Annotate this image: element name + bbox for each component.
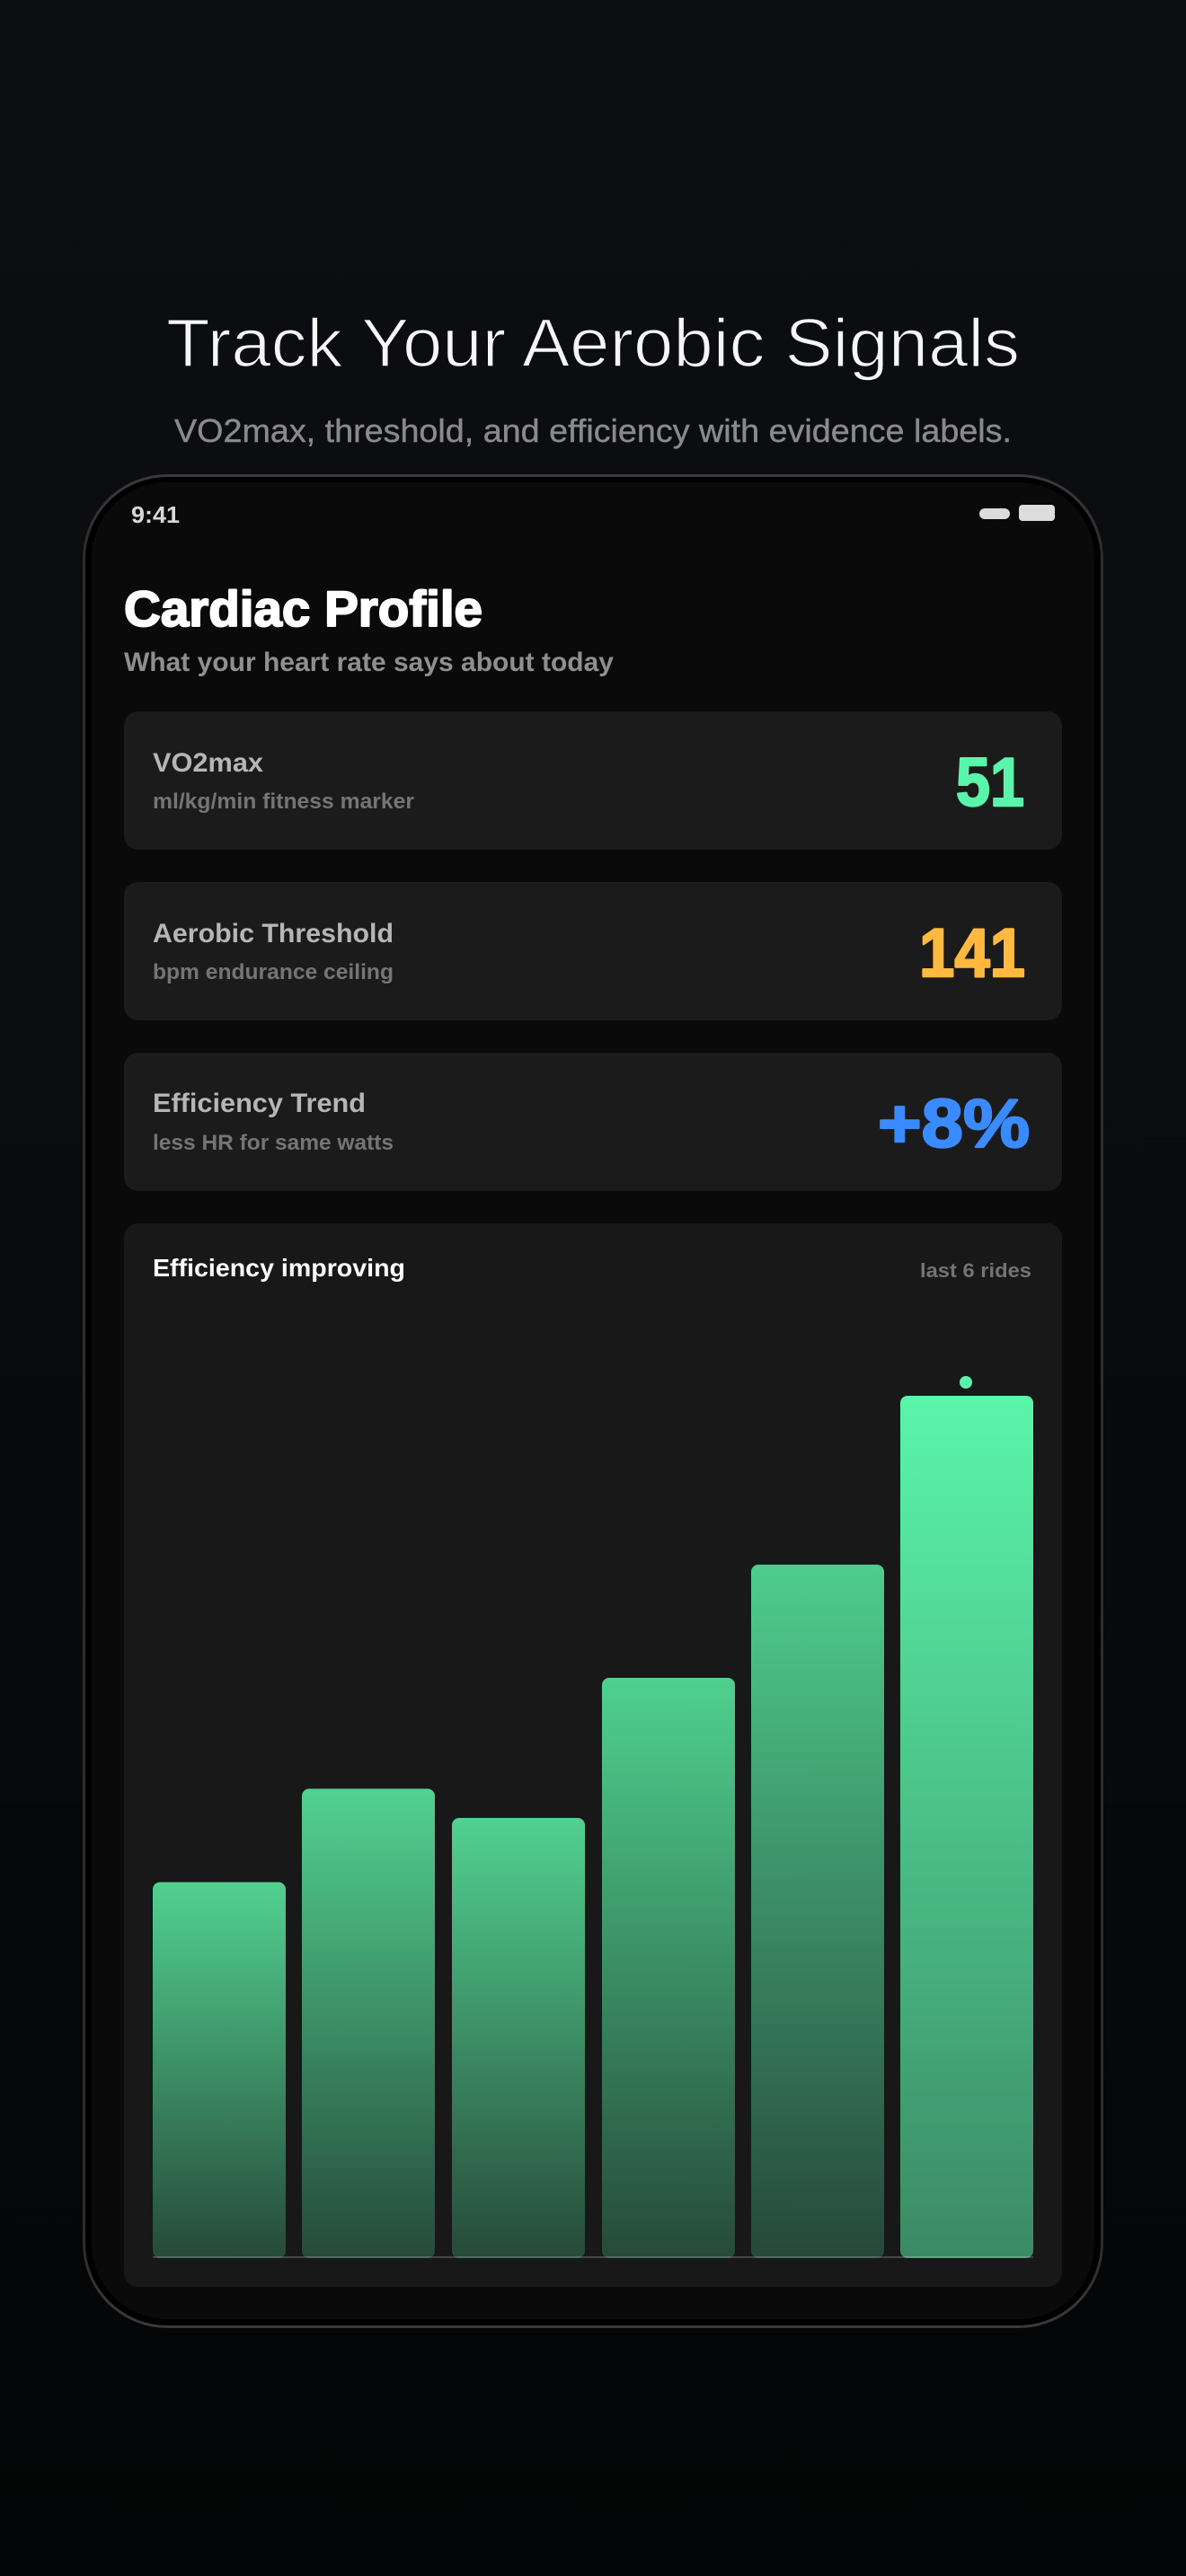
phone frame xyxy=(84,476,1102,2326)
panel: VO2max xyxy=(124,711,1062,850)
value: 51 xyxy=(956,745,1024,821)
subtitle: VO2max, threshold, and efficiency with evidence labels. xyxy=(174,412,1012,449)
bar 4 xyxy=(602,1678,735,2258)
bar 2 xyxy=(302,1789,435,2258)
label: Aerobic Threshold xyxy=(153,919,394,948)
title: Track Your Aerobic Signals xyxy=(166,305,1020,382)
panel: efficiency chart xyxy=(124,1223,1062,2287)
label: Efficiency Trend xyxy=(153,1089,366,1118)
screen heading: Cardiac Profile xyxy=(124,580,482,637)
marker dot xyxy=(960,1376,972,1389)
value: +8% xyxy=(878,1086,1030,1162)
bar 1 xyxy=(153,1883,286,2258)
bar chart xyxy=(153,1376,1033,2258)
description: bpm endurance ceiling xyxy=(153,960,394,984)
bar 3 xyxy=(452,1818,585,2258)
description: less HR for same watts xyxy=(153,1131,394,1155)
chart range label: last 6 rides xyxy=(920,1259,1031,1282)
bar 6 xyxy=(900,1396,1033,2258)
status bar xyxy=(131,501,1055,528)
battery icon xyxy=(1019,505,1055,521)
screen subheading: What your heart rate says about today xyxy=(124,648,614,677)
label: VO2max xyxy=(153,748,263,778)
signal icon xyxy=(979,508,1010,519)
baseline xyxy=(153,2256,1033,2258)
panel: efficiency trend xyxy=(124,1053,1062,1191)
clock: 9:41 xyxy=(131,501,180,528)
bar 5 xyxy=(751,1565,884,2258)
description: ml/kg/min fitness marker xyxy=(153,790,414,814)
panel: aerobic threshold xyxy=(124,882,1062,1020)
value: 141 xyxy=(919,915,1025,992)
phone screen xyxy=(92,482,1094,2319)
chart title: Efficiency improving xyxy=(153,1254,405,1282)
